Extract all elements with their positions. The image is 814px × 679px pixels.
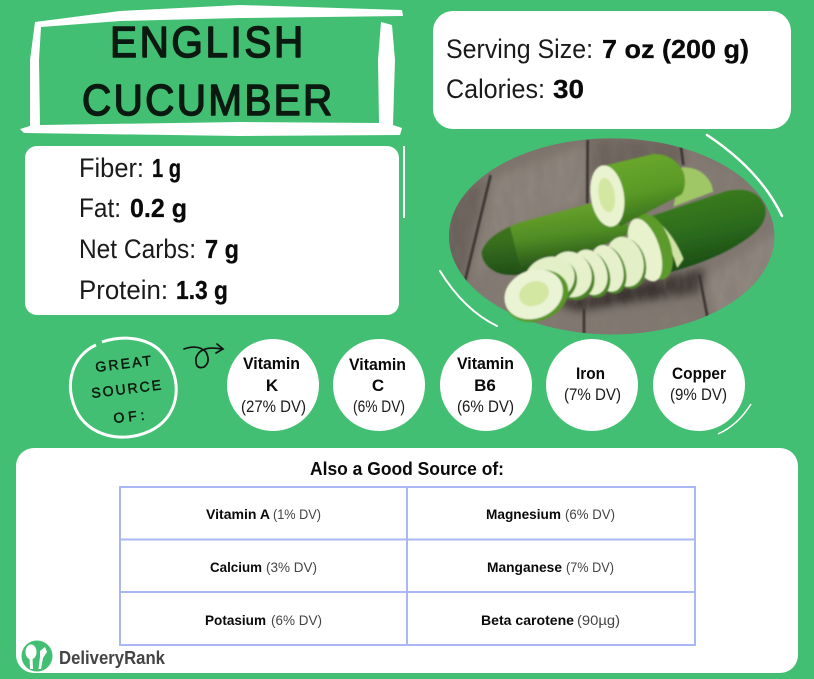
circle: vitamin B6 bbox=[440, 339, 532, 431]
panel: serving size and calories bbox=[433, 11, 791, 129]
cut edge bbox=[650, 218, 683, 268]
nutrient table: Beta carotene bbox=[481, 612, 574, 628]
protein bbox=[79, 275, 228, 305]
title text: ENGLISH bbox=[110, 17, 303, 66]
fiber: Fiber: bbox=[79, 153, 144, 183]
badge text: SOURCE bbox=[90, 377, 162, 401]
circle: copper: (9% DV) bbox=[670, 385, 727, 404]
fiber: 1 g bbox=[152, 153, 181, 183]
circle: iron bbox=[546, 339, 638, 431]
nutrient table: Calcium bbox=[210, 559, 262, 575]
nutrient table: (6% DV) bbox=[565, 506, 615, 522]
back cucumber light piece bbox=[673, 167, 713, 207]
photo accent arcs bbox=[440, 135, 782, 326]
nutrient table: (6% DV) bbox=[271, 612, 322, 628]
panel: macronutrients bbox=[25, 146, 405, 315]
calories: 30 bbox=[553, 74, 584, 104]
thick slice bbox=[621, 209, 680, 286]
calories: Calories: bbox=[446, 74, 545, 104]
nutrient table: (90µg) bbox=[577, 612, 620, 628]
circle: iron: Iron bbox=[576, 364, 605, 383]
circle: vitamin K: K bbox=[266, 376, 279, 395]
title text bbox=[82, 17, 332, 124]
badge: great source of bbox=[70, 338, 176, 437]
net carbs: Net Carbs: bbox=[79, 234, 196, 264]
protein: 1.3 g bbox=[176, 275, 228, 305]
logo icon bbox=[22, 640, 52, 672]
nutrient table: Magnesium bbox=[486, 506, 561, 522]
nutrient table bbox=[120, 487, 695, 645]
circle: vitamin B6: B6 bbox=[474, 376, 496, 395]
circle: iron: (7% DV) bbox=[564, 385, 621, 404]
fat: Fat: bbox=[79, 193, 121, 223]
circle: vitamin K bbox=[227, 339, 319, 431]
arrow: loop pointing to vitamins bbox=[184, 344, 223, 368]
copper accent arc bbox=[718, 404, 751, 434]
circle: vitamin B6: Vitamin bbox=[457, 354, 514, 373]
fiber bbox=[79, 153, 181, 183]
title frame and heading bbox=[20, 5, 403, 136]
nutrient table: Vitamin A bbox=[206, 506, 270, 522]
serving size: 7 oz (200 g) bbox=[602, 34, 749, 64]
nutrient table: Manganese bbox=[487, 559, 562, 575]
right cucumber bbox=[650, 190, 766, 272]
cucumber slices bbox=[497, 232, 652, 331]
protein: Protein: bbox=[79, 275, 168, 305]
circle: vitamin C: C bbox=[372, 376, 384, 395]
logo wordmark: DeliveryRank bbox=[59, 648, 166, 668]
title brush frame bbox=[20, 5, 403, 136]
photo: sliced cucumbers on wood bbox=[440, 135, 785, 338]
badge text: OF: bbox=[113, 407, 145, 426]
badge text bbox=[90, 352, 162, 426]
badge text: GREAT bbox=[94, 352, 152, 375]
fat bbox=[79, 193, 187, 223]
circle: copper: Copper bbox=[672, 364, 726, 383]
nutrient table: (1% DV) bbox=[273, 506, 321, 522]
nutrient table: Potasium bbox=[205, 612, 266, 628]
circle: vitamin B6: (6% DV) bbox=[457, 397, 514, 416]
circle: vitamin C bbox=[333, 339, 425, 431]
serving size: Serving Size: bbox=[446, 34, 593, 64]
title text: CUCUMBER bbox=[82, 75, 332, 124]
circle: copper bbox=[653, 339, 745, 431]
logo: DeliveryRank bbox=[22, 640, 166, 672]
table heading: Also a Good Source of: bbox=[310, 459, 504, 479]
circle: vitamin K: Vitamin bbox=[243, 354, 300, 373]
fat: 0.2 g bbox=[130, 193, 187, 223]
net carbs: 7 g bbox=[205, 234, 239, 264]
panel: also a good source of bbox=[16, 448, 798, 673]
circle: vitamin C: Vitamin bbox=[349, 355, 406, 374]
long cucumber dark tip bbox=[482, 227, 520, 273]
long cucumber bbox=[482, 203, 630, 275]
cut cucumber piece bbox=[586, 154, 685, 229]
nutrient table: (7% DV) bbox=[566, 559, 614, 575]
nutrient table: (3% DV) bbox=[266, 559, 317, 575]
circle: vitamin K: (27% DV) bbox=[241, 397, 306, 416]
circle: vitamin C: (6% DV) bbox=[353, 397, 405, 416]
serving size bbox=[446, 34, 749, 64]
